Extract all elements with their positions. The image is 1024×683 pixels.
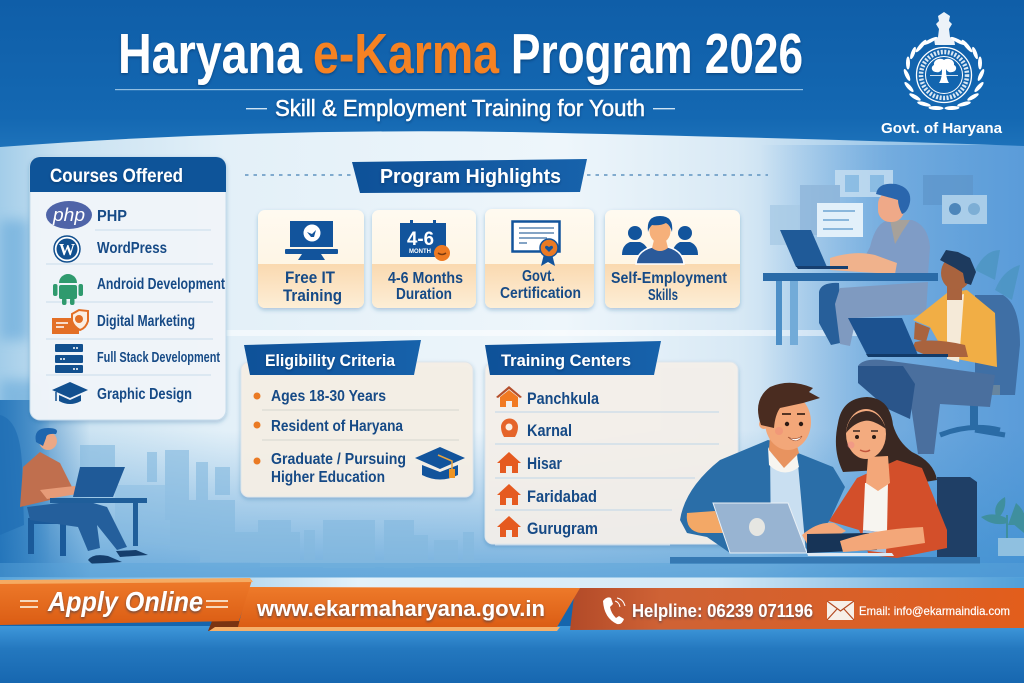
courses heading bbox=[30, 157, 226, 192]
skyline backdrop bbox=[80, 445, 480, 568]
center: Faridabad: Faridabad bbox=[527, 487, 597, 506]
chair bbox=[937, 477, 977, 557]
icon: certificate bbox=[512, 222, 560, 266]
illustration: office backdrop bbox=[770, 170, 1020, 300]
apply online ribbon: Apply Online bbox=[47, 586, 203, 617]
illustration: person at desk, top bbox=[763, 184, 987, 346]
heading: eligibility: Eligibility Criteria bbox=[265, 351, 396, 370]
website ribbon: www.ekarmaharyana.gov.in bbox=[256, 596, 545, 621]
icon: Haryana emblem bbox=[902, 12, 986, 110]
icon: calendar: MONTH bbox=[409, 249, 431, 255]
trousers bbox=[858, 360, 995, 454]
title: Program 2026: Program 2026 bbox=[511, 22, 803, 86]
icon: computer bbox=[285, 221, 338, 260]
icon: phone bbox=[603, 597, 625, 624]
center: Panchkula bbox=[496, 386, 599, 408]
chair bbox=[975, 295, 1020, 395]
heading: Program Highlights bbox=[352, 159, 587, 193]
course: Graphic Design bbox=[52, 382, 192, 404]
panel: eligibility criteria bbox=[241, 340, 473, 497]
center: Karnal bbox=[501, 418, 572, 440]
contact ribbon bbox=[570, 588, 1024, 630]
illustration: plant bbox=[981, 497, 1024, 556]
title: e-Karma: e-Karma bbox=[313, 22, 500, 86]
desk bbox=[763, 273, 938, 281]
panel: training centers bbox=[485, 341, 738, 545]
card: Free IT Training: Free IT bbox=[285, 268, 336, 287]
course: PHP: PHP bbox=[97, 208, 127, 225]
illustration: person with orange shirt bbox=[848, 250, 1020, 454]
body bbox=[913, 290, 997, 367]
heading: training centers: Training Centers bbox=[501, 351, 631, 370]
course: WordPress bbox=[54, 236, 167, 262]
course: Graphic Design: Graphic Design bbox=[97, 386, 192, 403]
man bbox=[680, 383, 845, 553]
card: Self-Employment Skills: Skills bbox=[648, 287, 678, 304]
center: Gurugram bbox=[497, 516, 598, 538]
dashed rule: highlights bbox=[245, 174, 768, 176]
item: education bbox=[254, 451, 406, 486]
illustration: couple with laptop bbox=[670, 383, 980, 564]
woman bbox=[802, 397, 947, 558]
desk bbox=[670, 557, 980, 564]
title rule bbox=[115, 89, 803, 90]
website ribbon bbox=[208, 587, 580, 631]
course: Full Stack Development bbox=[55, 344, 220, 373]
screen note bbox=[817, 203, 863, 237]
center: Karnal: Karnal bbox=[527, 421, 572, 440]
center: Faridabad bbox=[497, 484, 597, 506]
panel: courses offered bbox=[30, 157, 226, 420]
title: Haryana: Haryana bbox=[118, 22, 303, 86]
card: 4-6 Months Duration: Duration bbox=[396, 286, 452, 303]
courses heading: Courses Offered bbox=[50, 166, 183, 187]
card: Govt. Certification: Certification bbox=[500, 285, 581, 302]
email: Email: info@ekarmaindia.com bbox=[859, 604, 1010, 618]
card: 4-6 Months Duration bbox=[372, 210, 476, 308]
helpline: Helpline: 06239 071196 bbox=[632, 601, 813, 621]
card: Self-Employment Skills: Self-Employment bbox=[611, 270, 728, 287]
course: PHP: php bbox=[52, 205, 85, 225]
laptop bbox=[73, 467, 125, 497]
course: WordPress: W bbox=[59, 240, 75, 259]
course: Full Stack Development: Full Stack Development bbox=[97, 349, 220, 366]
subtitle: Skill & Employment Training for Youth bbox=[275, 95, 645, 121]
card: Free IT Training: Training bbox=[283, 286, 342, 305]
emblem caption: Govt. of Haryana bbox=[881, 120, 1003, 137]
heading: Program Highlights: Program Highlights bbox=[380, 165, 561, 188]
item: education: Graduate / Pursuing bbox=[271, 451, 406, 468]
laptop bbox=[713, 503, 925, 556]
icon: calendar bbox=[400, 220, 450, 261]
card: Self-Employment Skills bbox=[605, 210, 740, 308]
footer background bbox=[0, 563, 1024, 683]
item: age: Ages 18-30 Years bbox=[271, 388, 386, 405]
item: residence: Resident of Haryana bbox=[271, 418, 403, 435]
apply online ribbon bbox=[0, 578, 253, 625]
heading: eligibility bbox=[244, 340, 421, 375]
center: Gurugram: Gurugram bbox=[527, 519, 598, 538]
card: Govt. Certification bbox=[485, 209, 594, 308]
course: PHP bbox=[46, 201, 127, 229]
title bbox=[118, 22, 803, 86]
icon: calendar: 4-6 bbox=[407, 229, 434, 250]
icon: envelope bbox=[827, 601, 854, 620]
card: Govt. Certification: Govt. bbox=[522, 268, 555, 285]
header band bbox=[0, 0, 1024, 147]
course: Android Development: Android Development bbox=[97, 276, 226, 293]
icon: people bbox=[622, 216, 698, 264]
laptop bbox=[780, 230, 827, 267]
item: education: Higher Education bbox=[271, 469, 385, 486]
heading: training centers bbox=[485, 341, 661, 375]
center: Panchkula: Panchkula bbox=[527, 389, 599, 408]
laptop bbox=[848, 318, 918, 355]
card: Free IT Training bbox=[258, 210, 364, 308]
course: Android Development bbox=[53, 274, 226, 305]
card: 4-6 Months Duration: 4-6 Months bbox=[388, 270, 463, 287]
icon: graduation cap bbox=[415, 447, 465, 480]
center: Hisar: Hisar bbox=[527, 454, 562, 473]
course: WordPress: WordPress bbox=[97, 240, 167, 257]
desk bbox=[50, 498, 147, 503]
call window bbox=[942, 195, 987, 224]
center: Hisar bbox=[497, 452, 562, 473]
illustration: person on the left bbox=[0, 415, 148, 564]
course: Digital Marketing bbox=[52, 310, 195, 334]
course: Digital Marketing: Digital Marketing bbox=[97, 313, 195, 330]
